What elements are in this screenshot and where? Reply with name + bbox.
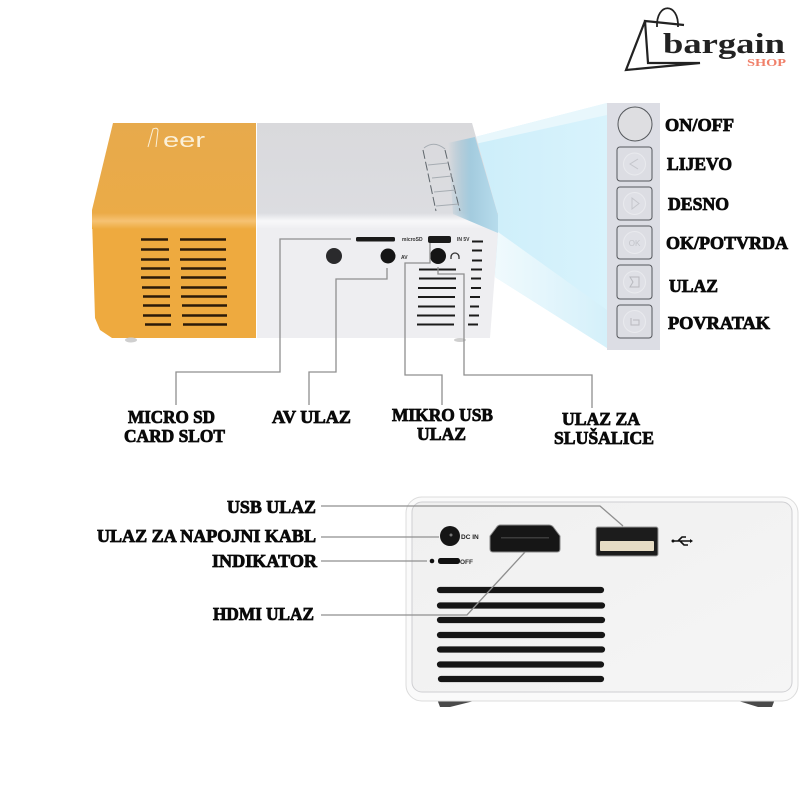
label: hdmi ulaz: HDMI ULAZ [213,604,314,624]
button: input [617,265,652,299]
label: ulaz: ULAZ [669,276,718,296]
projector: rear view [406,497,798,707]
dc in port [440,526,479,546]
leader: hdmi [321,552,525,615]
orange housing [92,123,256,338]
label: ulaz za slusalice: ULAZ ZA [562,409,640,429]
ports and vents [125,236,483,342]
leader: indicator [321,560,427,562]
button: ok: OK [629,239,641,248]
hdmi port [490,525,560,552]
vents [440,590,602,679]
label: micro sd card slot: CARD SLOT [124,426,225,446]
top buttons [423,144,460,211]
indicator [430,558,473,566]
ports and vents: AV [401,255,408,261]
button: left [617,147,652,181]
leader: av [309,268,387,405]
feet [437,699,775,707]
label: on/off: ON/OFF [665,115,734,135]
dc in port: DC IN [461,534,479,541]
leader: headphones [438,267,592,408]
leader: dc in [321,536,439,538]
leader: usb [321,506,623,526]
white housing [257,123,498,338]
rear housing [406,497,798,701]
leader: micro sd [176,239,351,405]
label: lijevo: LIJEVO [667,154,732,174]
logo: bargain shop: SHOP [747,58,786,69]
label: power cable: ULAZ ZA NAPOJNI KABL [97,526,316,546]
button: back [617,305,652,338]
label: indikator: INDIKATOR [212,551,318,571]
projector: top view [92,123,498,342]
brand: Meer [148,128,205,152]
logo: bargain shop: bargain [663,29,786,60]
label: ok/potvrda: OK/POTVRDA [666,233,788,253]
logo: bargain shop [626,8,786,70]
usb port [596,527,658,556]
ports and vents: IN 5V [457,237,470,243]
label: ulaz za slusalice [554,409,654,448]
label: mikro usb ulaz: ULAZ [417,424,466,444]
icon: usb [672,537,693,545]
label: mikro usb ulaz [392,405,493,444]
label: povratak: POVRATAK [668,313,770,333]
ports and vents: microSD [402,237,423,243]
light beam [475,103,607,348]
button panel [607,103,660,350]
button: on/off [618,107,652,141]
leader: micro usb [405,243,442,405]
label: mikro usb ulaz: MIKRO USB [392,405,493,425]
label: av ulaz: AV ULAZ [272,407,351,427]
button: right [617,187,652,220]
label: micro sd card slot: MICRO SD [128,407,215,427]
brand: Meer: eer [163,130,205,152]
label: micro sd card slot [124,407,225,446]
button: ok [617,226,652,259]
label: ulaz za slusalice: SLUŠALICE [554,427,654,448]
label: usb ulaz: USB ULAZ [227,497,316,517]
indicator: OFF [460,559,473,566]
label: desno: DESNO [668,194,729,214]
